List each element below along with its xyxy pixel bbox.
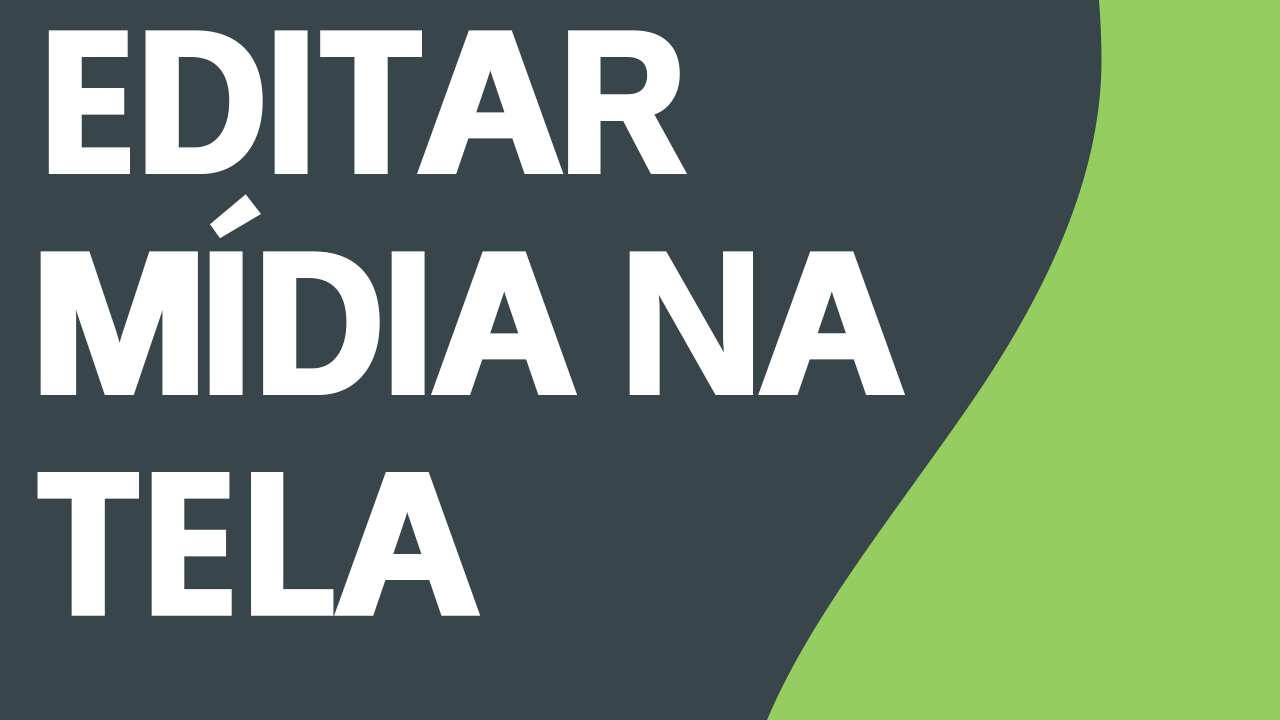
title line 1: EDITAR — [49, 0, 686, 216]
title line 2: MÍDIA NA: Í — [198, 209, 259, 436]
title line 2: MÍDIA NA: I — [380, 209, 436, 436]
title line 2: MÍDIA NA — [40, 194, 905, 395]
title line 3: TELA: E — [152, 430, 228, 657]
title line 3: TELA: T — [41, 431, 135, 658]
title line 3: TELA: L — [248, 430, 331, 657]
title line 2: MÍDIA NA: A — [432, 209, 577, 436]
title line 3: TELA: A — [335, 430, 480, 657]
title line 3: TELA — [41, 430, 480, 658]
decorative green wave shape — [767, 0, 1280, 720]
title line 2: MÍDIA NA: D — [255, 210, 383, 437]
title line 2: MÍDIA NA: N — [618, 210, 765, 437]
title line 2: MÍDIA NA: M — [30, 211, 208, 437]
title line 2: MÍDIA NA: A — [759, 209, 905, 436]
